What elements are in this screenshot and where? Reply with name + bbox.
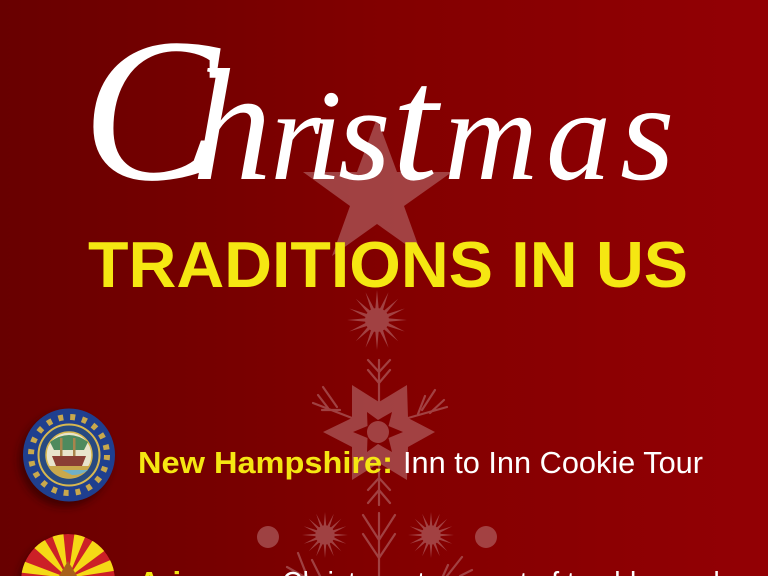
icon: right starburst xyxy=(408,512,454,558)
title: i xyxy=(306,64,342,208)
title: a xyxy=(546,64,611,208)
title: m xyxy=(444,64,538,208)
icon: central snowflake xyxy=(313,360,447,505)
New Hampshire description: Inn to Inn Cookie Tour xyxy=(403,445,703,480)
icon: left ornament xyxy=(257,526,279,548)
decorative tree xyxy=(257,118,497,576)
icon: tree top star xyxy=(303,118,452,256)
title: r xyxy=(270,64,321,208)
Arizona flag icon xyxy=(14,534,115,576)
icon: top starburst xyxy=(347,290,407,350)
subtitle: TRADITIONS IN US xyxy=(88,228,688,301)
title: t xyxy=(392,32,442,215)
title: s xyxy=(338,60,391,209)
title: s xyxy=(620,55,674,210)
icon: left starburst xyxy=(302,512,348,558)
icon: right ornament xyxy=(475,526,497,548)
New Hampshire label: New Hampshire: xyxy=(138,445,393,480)
icon: tree trunk branches xyxy=(287,513,472,576)
title: C xyxy=(82,0,221,224)
New Hampshire seal xyxy=(19,408,115,507)
title: h xyxy=(192,36,272,214)
